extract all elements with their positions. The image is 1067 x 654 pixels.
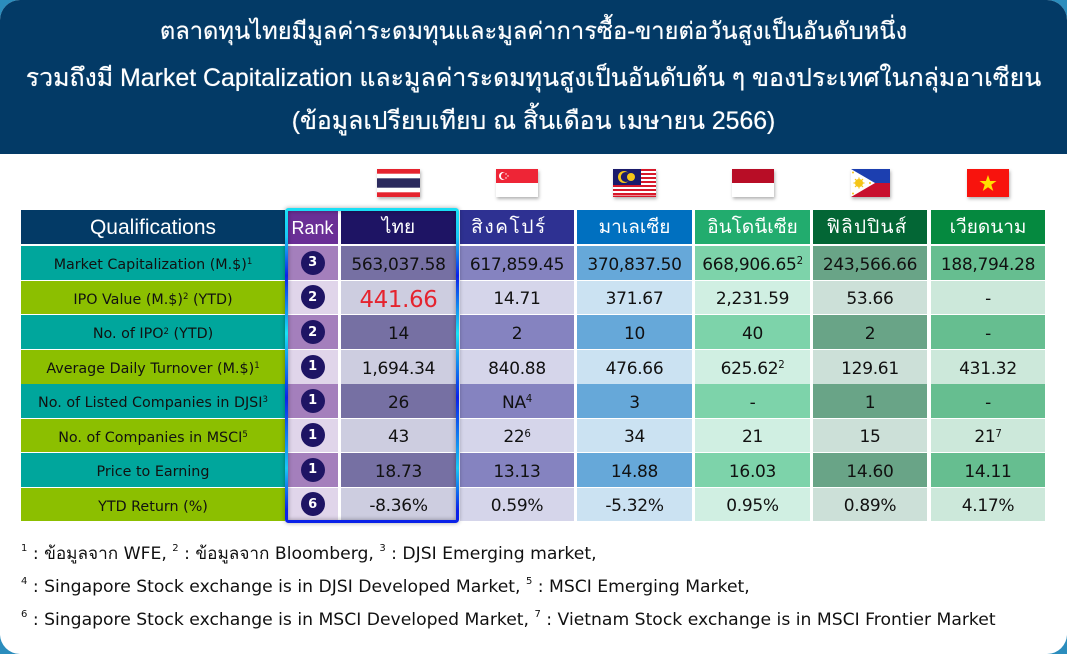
row: YTD Return: -5.32% [605, 496, 664, 516]
flag: Philippines [850, 169, 893, 201]
row: Average Daily Turnover: 840.88 [488, 359, 546, 379]
title line 2: รวมถึงมี Market Capitalization และมูลค่าระดมทุนสูงเป็นอันดับต้น ๆ ของประเทศในกลุ่มอาเซียน [26, 64, 1041, 92]
row: Market Capitalization: 370,837.50 [587, 255, 682, 275]
row: Companies in MSCI: No. of Companies in MSCI5 [58, 430, 248, 446]
row: Price to Earning: 16.03 [729, 462, 776, 482]
row: Price to Earning: 14.88 [611, 462, 658, 482]
row: Price to Earning: 13.13 [493, 462, 541, 482]
row: Average Daily Turnover: 476.66 [606, 359, 663, 379]
row: Market Capitalization: 3 [308, 255, 317, 270]
row: Companies in MSCI [21, 419, 1045, 452]
row: IPO Value: 441.66 [360, 287, 437, 313]
row: Listed Companies in DJSI: 3 [629, 393, 640, 413]
row: Market Capitalization: 617,859.45 [470, 255, 564, 275]
row: Average Daily Turnover [21, 350, 1045, 384]
footnote line 2: 4 : Singapore Stock exchange is in DJSI Developed Market, 5 : MSCI Emerging Market, [21, 576, 750, 597]
row: Average Daily Turnover: 625.622 [721, 359, 784, 379]
row: No. of IPO: 2 [865, 324, 875, 344]
title line 3: (ข้อมูลเปรียบเทียบ ณ สิ้นเดือน เมษายน 2566) [292, 108, 775, 135]
row: No. of IPO: 2 [512, 324, 522, 344]
row: YTD Return: 0.59% [491, 496, 543, 516]
header: Indonesia: อินโดนีเซีย [707, 217, 798, 238]
row: Price to Earning: 14.11 [964, 462, 1012, 482]
row: IPO Value: - [985, 289, 991, 309]
row: Market Capitalization: 563,037.58 [351, 255, 446, 275]
table header row [21, 210, 1045, 244]
row: Price to Earning: 14.60 [846, 462, 894, 482]
header: Philippines [813, 210, 927, 244]
row: Average Daily Turnover: 129.61 [841, 359, 899, 379]
row: Companies in MSCI: 15 [859, 427, 881, 447]
row: Price to Earning: 1 [308, 462, 317, 477]
row: IPO Value: 2 [308, 290, 317, 305]
row: No. of IPO: 10 [624, 324, 645, 344]
row: Listed Companies in DJSI [21, 384, 1045, 418]
row: Companies in MSCI: 43 [388, 427, 409, 447]
row: Average Daily Turnover: Average Daily Turnover (M.$)1 [46, 361, 260, 377]
row: Listed Companies in DJSI: NA4 [502, 393, 532, 413]
header: Indonesia [695, 210, 810, 244]
row: YTD Return: 6 [308, 497, 317, 512]
footnote line 3: 6 : Singapore Stock exchange is in MSCI Developed Market, 7 : Vietnam Stock exchange is in MSCI Frontier Market [21, 609, 996, 630]
title banner [0, 0, 1067, 154]
row: YTD Return: -8.36% [369, 496, 428, 516]
row: No. of IPO: No. of IPO2 (YTD) [93, 326, 213, 342]
header: Qualifications [21, 210, 285, 244]
header: Rank: Rank [291, 218, 334, 238]
highlight frame: Thailand column [282, 205, 462, 526]
row: Price to Earning: 18.73 [375, 462, 422, 482]
row: IPO Value: 53.66 [846, 289, 894, 309]
row: No. of IPO: 40 [742, 324, 763, 344]
row: Market Capitalization [21, 246, 1045, 280]
row: Average Daily Turnover: 1,694.34 [362, 359, 435, 379]
row: Market Capitalization: 668,906.652 [702, 255, 803, 275]
row: Price to Earning [21, 453, 1045, 487]
row: YTD Return: 0.89% [844, 496, 896, 516]
row: Listed Companies in DJSI: - [750, 393, 755, 413]
row: Market Capitalization: 243,566.66 [823, 255, 917, 275]
row: IPO Value: 2,231.59 [716, 289, 789, 309]
header: Thailand: ไทย [382, 217, 415, 238]
header: Malaysia: มาเลเซีย [599, 217, 670, 238]
row: Market Capitalization: Market Capitalization (M.$)1 [54, 257, 252, 273]
row: YTD Return [21, 488, 1045, 521]
row: Listed Companies in DJSI: - [985, 393, 991, 413]
row: No. of IPO [21, 315, 1045, 349]
row: Listed Companies in DJSI: 1 [865, 393, 875, 413]
row: Listed Companies in DJSI: No. of Listed Companies in DJSI3 [38, 395, 268, 411]
row: Average Daily Turnover: 431.32 [959, 359, 1017, 379]
row: Companies in MSCI: 217 [974, 427, 1002, 447]
row: No. of IPO: 2 [308, 325, 317, 340]
header: Singapore [460, 210, 574, 244]
row: YTD Return: 4.17% [962, 496, 1014, 516]
header: Rank [287, 210, 338, 244]
row: YTD Return: YTD Return (%) [98, 499, 208, 515]
row: YTD Return: 0.95% [726, 496, 779, 516]
flag: Vietnam [966, 169, 1012, 201]
row: Companies in MSCI: 1 [308, 428, 317, 443]
footnote line 1: 1 : ข้อมูลจาก WFE, 2 : ข้อมูลจาก Bloomberg, 3 : DJSI Emerging market, [21, 543, 597, 564]
header: Vietnam [931, 210, 1045, 244]
row: Companies in MSCI: 34 [624, 427, 645, 447]
row: IPO Value: 371.67 [606, 289, 663, 309]
header: Philippines: ฟิลิปปินส์ [826, 217, 908, 238]
row: Listed Companies in DJSI: 1 [308, 393, 317, 408]
flag: Malaysia [612, 169, 659, 201]
row: No. of IPO: - [985, 324, 991, 344]
header: Qualifications: Qualifications [90, 216, 216, 239]
row: Listed Companies in DJSI: 26 [388, 393, 409, 413]
title line 1: ตลาดทุนไทยมีมูลค่าระดมทุนและมูลค่าการซื้อ-ขายต่อวันสูงเป็นอันดับหนึ่ง [160, 19, 907, 45]
row: Companies in MSCI: 21 [742, 427, 763, 447]
row: Average Daily Turnover: 1 [308, 359, 317, 374]
row: Companies in MSCI: 226 [503, 427, 531, 447]
header: Vietnam: เวียดนาม [950, 217, 1026, 238]
row: No. of IPO: 14 [388, 324, 409, 344]
row: IPO Value: IPO Value (M.$)2 (YTD) [73, 292, 233, 308]
flag: Indonesia [731, 169, 777, 201]
row: IPO Value [21, 281, 1045, 314]
flag: Singapore [495, 169, 541, 201]
row: Market Capitalization: 188,794.28 [941, 255, 1035, 275]
header: Thailand [341, 210, 456, 244]
header: Singapore: สิงคโปร์ [471, 217, 547, 238]
flag: Thailand [376, 169, 423, 201]
header: Malaysia [577, 210, 692, 244]
row: Price to Earning: Price to Earning [97, 464, 209, 480]
row: IPO Value: 14.71 [493, 289, 541, 309]
